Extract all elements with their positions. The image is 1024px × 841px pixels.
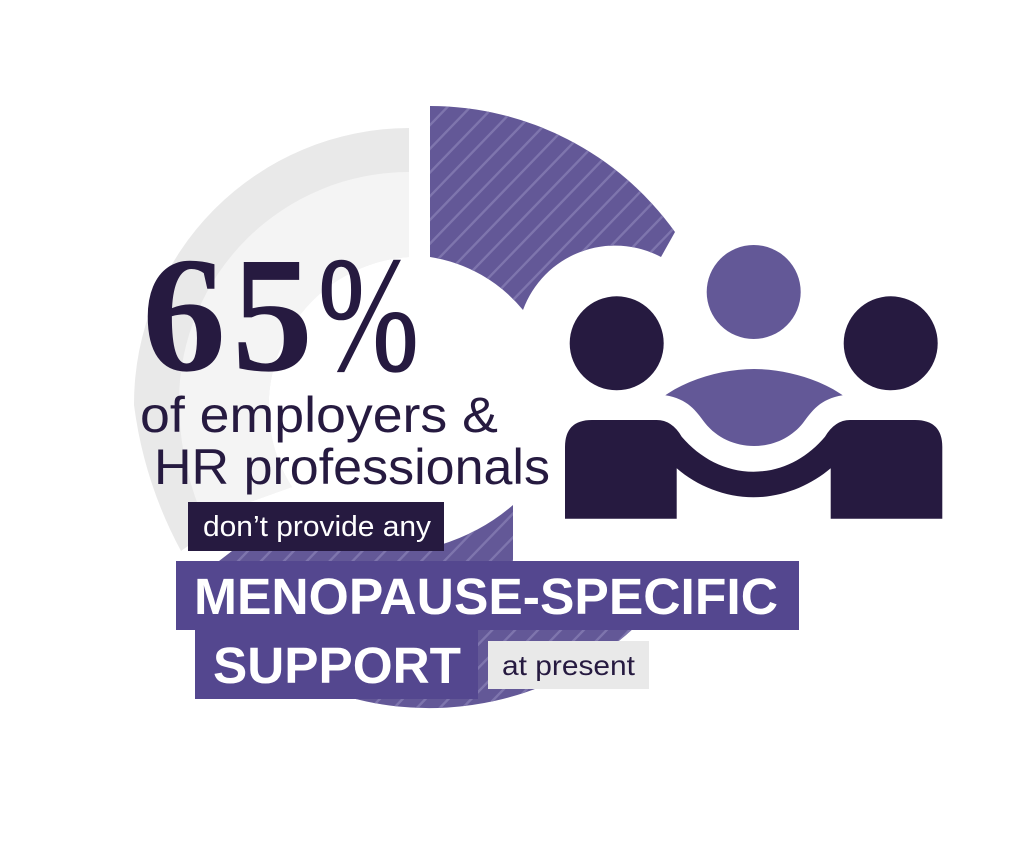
banner: menopause-specific support: [176, 561, 799, 699]
banner: menopause-specific support: SUPPORT: [213, 637, 461, 694]
right head: [844, 296, 938, 390]
grey segment inner ring: [179, 172, 409, 522]
label: don't provide any: [188, 502, 444, 551]
centre head: [707, 245, 801, 339]
text: HR professionals: HR professionals: [154, 439, 550, 495]
purple segment bottom: [219, 505, 688, 708]
icon: three people: [565, 245, 942, 519]
statistic: 65%: 5: [232, 223, 313, 406]
centre body: [665, 369, 843, 446]
purple segment top: [430, 106, 675, 310]
text: of employers &: of employers &: [140, 387, 498, 443]
left head: [570, 296, 664, 390]
banner: menopause-specific support: MENOPAUSE-SPECIFIC: [194, 568, 778, 625]
diagonal hatching on purple segments: [236, 106, 674, 708]
label: at present: [488, 641, 649, 689]
statistic: 65%: [142, 223, 419, 406]
statistic: 65%: 6: [142, 223, 226, 406]
label: at present: at present: [502, 650, 635, 681]
grey segment outer ring: [134, 128, 409, 551]
joined bodies: [565, 420, 942, 519]
statistic: 65%: %: [318, 223, 419, 406]
label: don't provide any: don’t provide any: [203, 511, 432, 543]
donut chart: [134, 106, 675, 708]
